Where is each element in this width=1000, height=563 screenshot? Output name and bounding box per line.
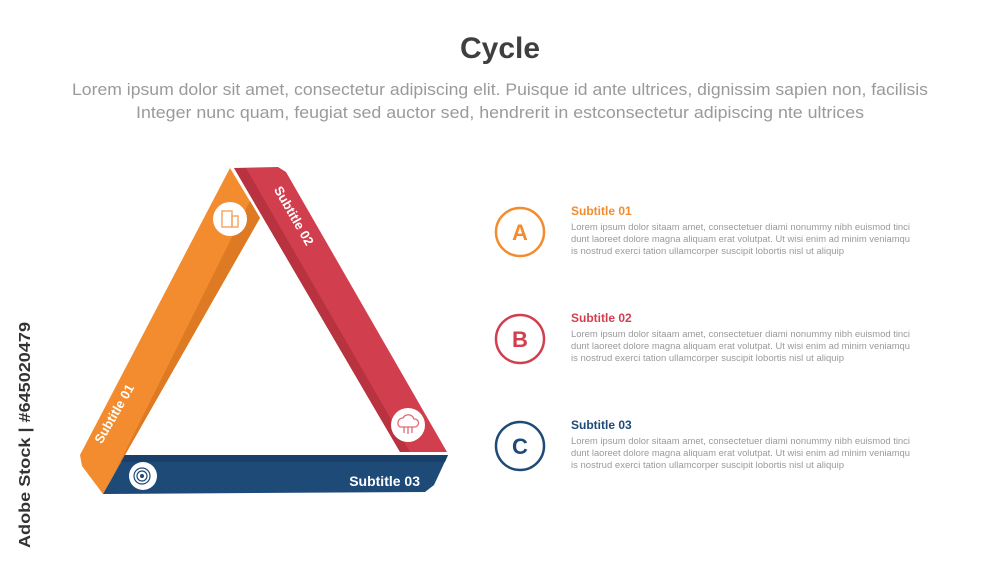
segment: subtitle 01 orange [80, 168, 260, 494]
icon: cloud [391, 408, 425, 442]
item C: Subtitle 03 [571, 418, 632, 432]
item B [496, 311, 910, 363]
icon: target [129, 462, 157, 490]
item B: is nostrud exerci tation ullamcorper suscipit lobortis nisl ut aliquip [571, 353, 844, 363]
icon: building [213, 202, 247, 236]
segment: subtitle 03 blue [103, 455, 448, 494]
item A: dunt laoreet dolore magna aliquam erat volutpat. Ut wisi enim ad minim veniamqu [571, 234, 910, 244]
item C: Lorem ipsum dolor sitaam amet, consectetuer diami nonummy nibh euismod tinci [571, 436, 910, 446]
subtitle text [72, 80, 928, 122]
segment: subtitle 02 red [234, 167, 447, 452]
subtitle text: Lorem ipsum dolor sit amet, consectetur adipiscing elit. Puisque id ante ultrices, dignissim sapien non, facilisis [72, 80, 928, 99]
item A [496, 204, 910, 256]
watermark side text: Adobe Stock | #645020479 [17, 322, 34, 548]
item B: Subtitle 02 [571, 311, 632, 325]
item C: is nostrud exerci tation ullamcorper suscipit lobortis nisl ut aliquip [571, 460, 844, 470]
item C: C [512, 434, 528, 459]
item C: dunt laoreet dolore magna aliquam erat volutpat. Ut wisi enim ad minim veniamqu [571, 448, 910, 458]
item B: dunt laoreet dolore magna aliquam erat volutpat. Ut wisi enim ad minim veniamqu [571, 341, 910, 351]
item C [496, 418, 910, 470]
item B: B [512, 327, 528, 352]
segment: subtitle 02 red: Subtitle 02 [271, 184, 317, 248]
item A: Subtitle 01 [571, 204, 632, 218]
segment: subtitle 01 orange: Subtitle 01 [91, 382, 137, 446]
segment: subtitle 03 blue: Subtitle 03 [349, 473, 420, 489]
title: Cycle [460, 32, 540, 65]
item A: A [512, 220, 528, 245]
triangle cycle diagram [80, 167, 448, 494]
item A: is nostrud exerci tation ullamcorper suscipit lobortis nisl ut aliquip [571, 246, 844, 256]
subtitle text: Integer nunc quam, feugiat sed auctor sed, hendrerit in estconsectetur adipiscing nte ultrices [136, 103, 864, 122]
item A: Lorem ipsum dolor sitaam amet, consectetuer diami nonummy nibh euismod tinci [571, 222, 910, 232]
item B: Lorem ipsum dolor sitaam amet, consectetuer diami nonummy nibh euismod tinci [571, 329, 910, 339]
